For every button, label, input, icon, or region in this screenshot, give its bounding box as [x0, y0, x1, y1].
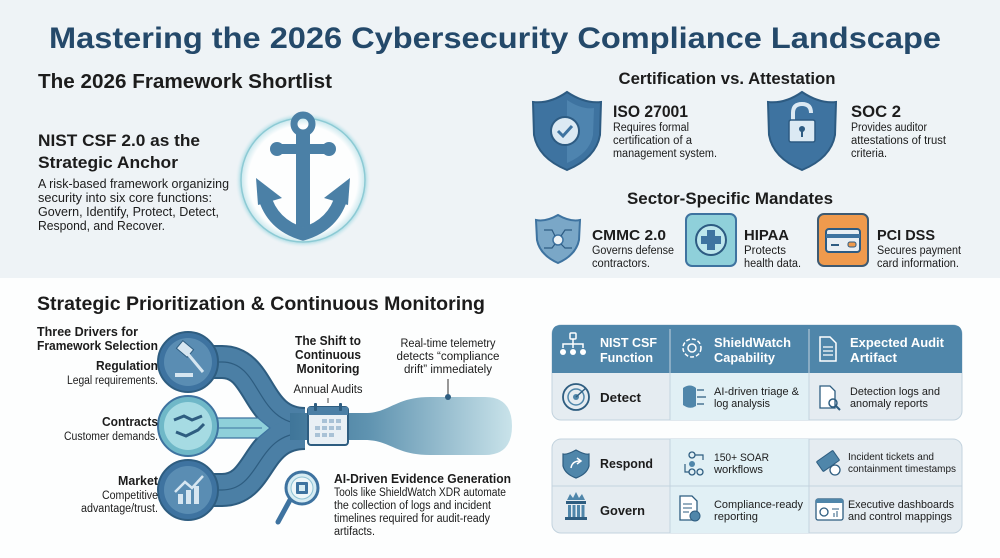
row: Detect: Detection logs and: [850, 386, 940, 398]
header: ShieldWatch Capability: ShieldWatch: [714, 335, 791, 350]
text block: shift to continuous monitoring: Annual Audits: [294, 384, 363, 396]
text block: PCI DSS: PCI DSS: [877, 227, 935, 244]
text block: contracts: Contracts: [102, 414, 158, 429]
row: Respond: containment timestamps: [848, 463, 956, 475]
row: Detect: AI-driven triage &: [714, 386, 800, 398]
callout: real-time telemetry: [396, 338, 500, 400]
row: Respond: 150+ SOAR: [714, 452, 769, 464]
text block: NIST CSF anchor: A risk-based framework organizing: [38, 177, 229, 191]
table card: respond and govern rows: [552, 439, 962, 533]
text block: ISO 27001: management system.: [613, 148, 717, 160]
text block: ISO 27001: ISO 27001: [613, 102, 688, 121]
text block: shift to continuous monitoring: Continuous: [295, 348, 361, 362]
text block: three drivers: [37, 325, 158, 353]
text block: market: advantage/trust.: [81, 503, 158, 515]
icon: market chart: [158, 460, 218, 520]
icon: magnifier chip: [278, 472, 318, 522]
row: Respond: [563, 450, 956, 478]
row: Detect: log analysis: [714, 398, 770, 410]
text block: market: [81, 473, 159, 515]
header: Expected Audit Artifact: Artifact: [850, 350, 898, 365]
text block: ISO 27001: Requires formal: [613, 122, 689, 134]
text block: ISO 27001: certification of a: [613, 135, 693, 147]
text block: SOC 2: attestations of trust: [851, 135, 947, 147]
text block: contracts: Customer demands.: [64, 431, 158, 443]
icon: regulation gavel: [158, 332, 218, 392]
text block: NIST CSF anchor: Respond, and Recover.: [38, 219, 165, 233]
text block: regulation: Regulation: [96, 358, 158, 373]
header: NIST CSF Function: NIST CSF: [600, 335, 657, 350]
text block: regulation: Legal requirements.: [67, 375, 158, 387]
text block: CMMC: CMMC 2.0: [592, 227, 666, 244]
text block: CMMC: Governs defense: [592, 245, 674, 257]
diagram: driver streams: [188, 362, 512, 490]
row: Govern: [565, 492, 954, 523]
row: Respond: workflows: [713, 464, 763, 476]
row: Govern: reporting: [714, 511, 758, 523]
text block: AI-driven evidence generation: the collection of logs and incident: [334, 500, 492, 512]
text block: three drivers: Three Drivers for: [37, 325, 138, 339]
text block: CMMC: [592, 227, 674, 270]
row: Respond: Respond: [600, 456, 653, 471]
text block: HIPAA: Protects: [744, 245, 786, 257]
icon: CMMC shield: [536, 215, 580, 263]
text block: SOC 2: criteria.: [851, 148, 887, 160]
header: NIST CSF Function: [560, 333, 657, 365]
text block: NIST CSF anchor: Govern, Identify, Protect, Detect,: [38, 205, 219, 219]
text block: market: Market: [118, 473, 159, 488]
icon: contracts handshake: [158, 396, 218, 456]
header: ShieldWatch Capability: Capability: [714, 350, 776, 365]
header: NIST CSF Function: Function: [600, 350, 653, 365]
icon: calendar: [308, 403, 348, 445]
text block: CMMC: contractors.: [592, 258, 650, 270]
heading: sector-specific mandates: Sector-Specific Mandates: [627, 189, 833, 208]
table card: header and detect row: [552, 325, 962, 420]
text block: market: Competitive: [102, 490, 158, 502]
top background panel: [0, 0, 1000, 278]
callout: real-time telemetry: drift” immediately: [404, 364, 492, 376]
text block: ISO 27001: [613, 102, 717, 160]
title: Mastering the 2026 Cybersecurity Compliance Landscape: [49, 22, 941, 55]
text block: PCI DSS: [877, 227, 962, 270]
text block: NIST CSF anchor: NIST CSF 2.0 as the: [38, 131, 200, 150]
icon: SOC 2 shield: [768, 92, 836, 170]
text block: AI-driven evidence generation: AI-Driven Evidence Generation: [334, 471, 511, 486]
text block: three drivers: Framework Selection: [37, 339, 158, 353]
heading: strategic prioritization: Strategic Prioritization & Continuous Monitoring: [37, 294, 485, 315]
text block: AI-driven evidence generation: timelines required for audit-ready: [334, 513, 490, 525]
text block: PCI DSS: Secures payment: [877, 245, 962, 257]
row: Govern: and control mappings: [848, 511, 952, 523]
text block: shift to continuous monitoring: [294, 334, 363, 403]
row: Detect: anomaly reports: [850, 398, 928, 410]
text block: AI-driven evidence generation: [334, 471, 511, 538]
heading: certification vs attestation: Certification vs. Attestation: [618, 69, 836, 88]
text block: regulation: [67, 358, 158, 387]
text block: HIPAA: [744, 227, 801, 270]
text block: NIST CSF anchor: Strategic Anchor: [38, 153, 178, 172]
row: Govern: Executive dashboards: [848, 499, 954, 511]
text block: AI-driven evidence generation: Tools like ShieldWatch XDR automate: [334, 487, 506, 499]
text block: NIST CSF anchor: [38, 131, 229, 233]
header: Expected Audit Artifact: Expected Audit: [850, 335, 945, 350]
row: Respond: Incident tickets and: [848, 451, 934, 463]
row: Govern: Govern: [600, 503, 645, 518]
text block: PCI DSS: card information.: [877, 258, 959, 270]
text block: HIPAA: HIPAA: [744, 227, 789, 244]
text block: SOC 2: Provides auditor: [851, 122, 927, 134]
heading: framework shortlist: The 2026 Framework Shortlist: [38, 71, 332, 93]
icon: PCI card: [818, 214, 868, 266]
header: ShieldWatch Capability: [683, 335, 791, 365]
text block: contracts: [64, 414, 158, 443]
row: Detect: Detect: [600, 390, 642, 405]
main flow: [290, 397, 512, 455]
text block: shift to continuous monitoring: Monitoring: [296, 362, 360, 376]
callout: real-time telemetry: detects “compliance: [396, 351, 500, 363]
text block: SOC 2: SOC 2: [851, 102, 901, 121]
row: Govern: Compliance-ready: [714, 499, 803, 511]
callout: real-time telemetry: Real-time telemetry: [400, 338, 496, 350]
icon: HIPAA: [686, 214, 736, 266]
icon: anchor: [235, 112, 371, 248]
text block: NIST CSF anchor: security into six core functions:: [38, 191, 212, 205]
header: Expected Audit Artifact: [820, 335, 945, 365]
text block: HIPAA: health data.: [744, 258, 801, 270]
text block: SOC 2: [851, 102, 947, 160]
text block: shift to continuous monitoring: The Shift to: [295, 334, 361, 348]
text block: AI-driven evidence generation: artifacts.: [334, 526, 375, 538]
row: Detect: [563, 384, 940, 410]
icon: ISO shield: [533, 92, 601, 170]
